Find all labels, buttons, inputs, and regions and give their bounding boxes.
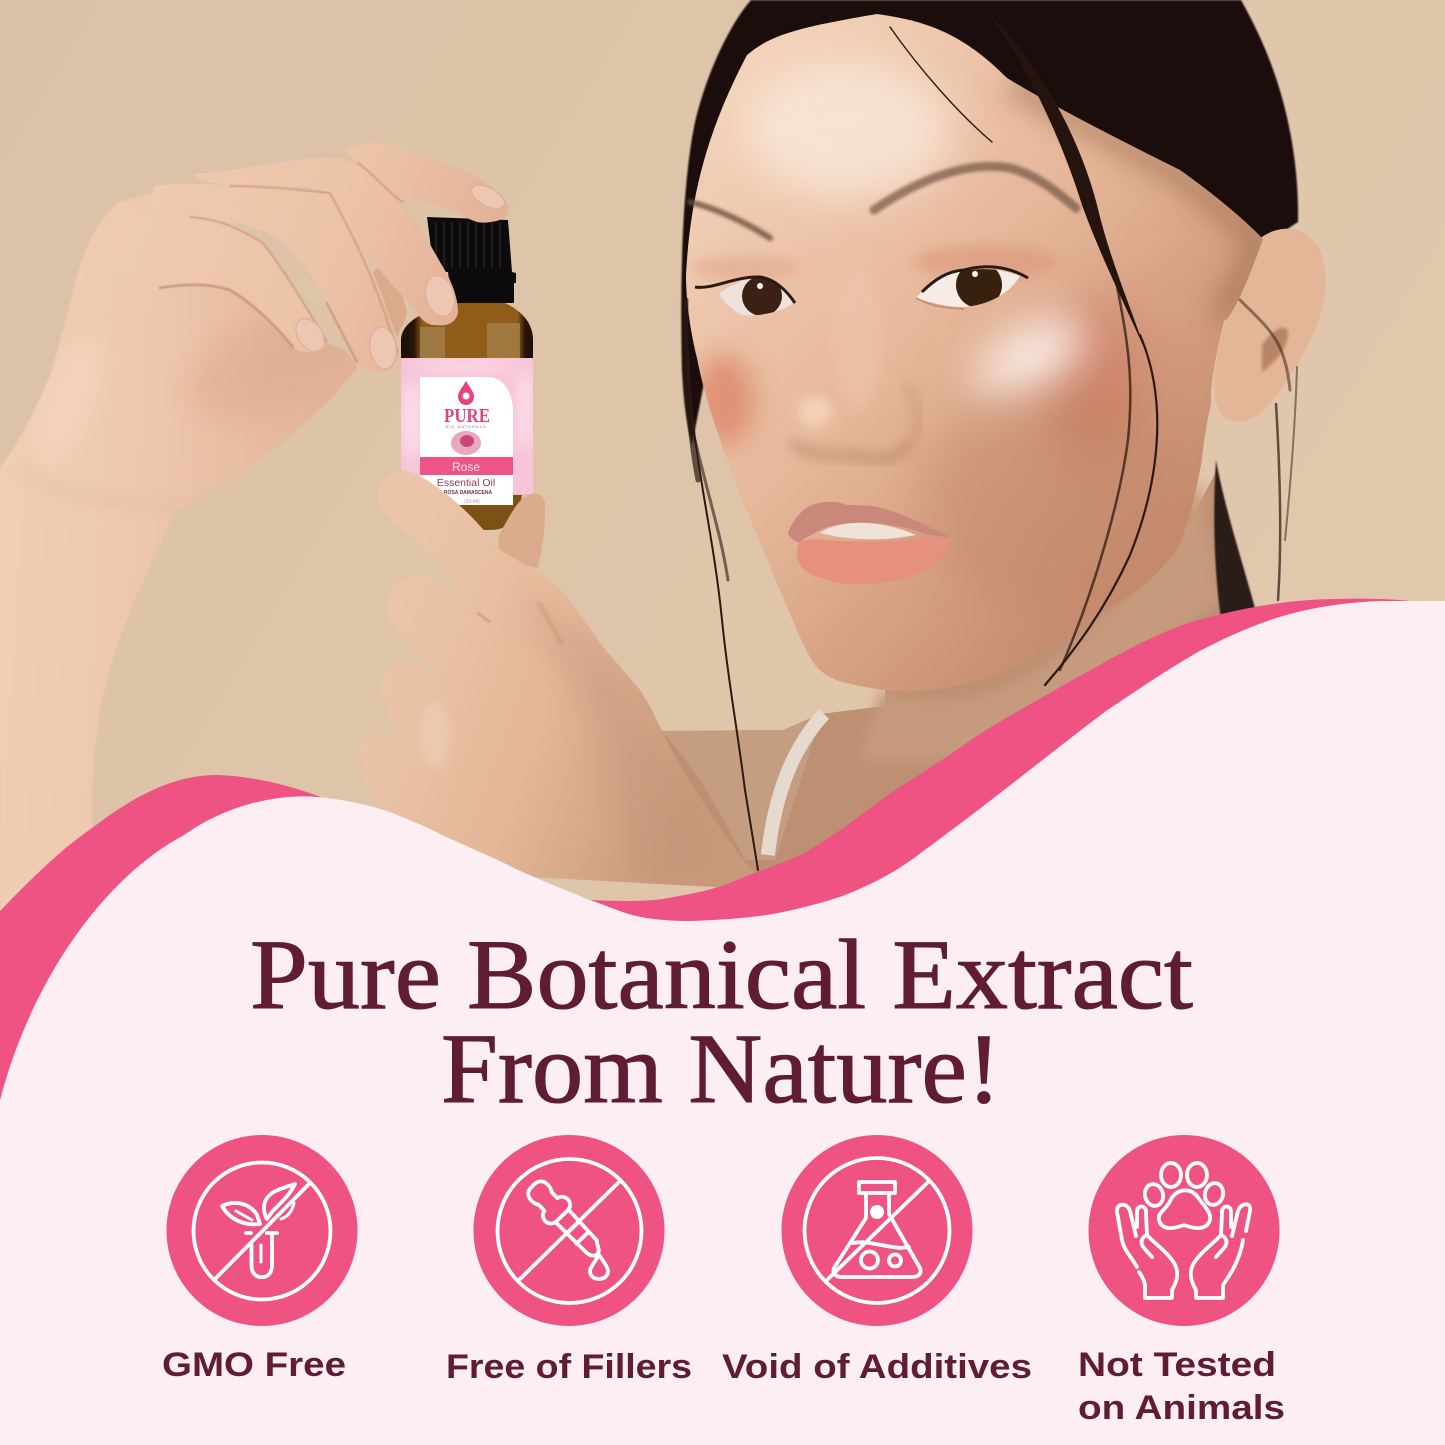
under nose shade — [792, 442, 908, 459]
hairline shade — [1010, 85, 1260, 320]
ear — [1214, 229, 1325, 421]
icon: GMO free — [166, 1135, 358, 1326]
left eyebrow — [690, 202, 770, 238]
finger separation shadows — [160, 163, 403, 362]
right cheek blush — [1045, 295, 1145, 465]
brand name: PURE — [444, 405, 490, 427]
left cheek blush — [694, 354, 754, 446]
under-chin warm tone — [926, 374, 1085, 570]
icon: void of additives — [782, 1135, 972, 1326]
right eye — [916, 262, 1028, 309]
bottle cap — [427, 217, 516, 303]
label: Free of Fillers: Free of Fillers — [446, 1348, 692, 1386]
fingernails — [290, 181, 508, 371]
light pink content panel — [0, 601, 1445, 1445]
upper hand fingers — [110, 143, 508, 372]
botanical name: ROSA DAMASCENA — [444, 490, 492, 496]
forehead highlight — [745, 60, 955, 200]
product type: Essential Oil — [437, 477, 495, 489]
label: Not Tested on Animals — [1078, 1346, 1285, 1427]
nose tip — [798, 396, 832, 428]
amber base — [430, 495, 522, 530]
face tones, clipped to the face — [690, 60, 1260, 610]
rose band — [420, 457, 513, 475]
right cheek shimmer — [962, 300, 1098, 416]
icon: not tested on animals — [1088, 1135, 1280, 1326]
label: GMO Free: GMO Free — [162, 1346, 346, 1384]
loose hair strands — [686, 10, 1297, 870]
little finger — [110, 202, 327, 353]
hand shading — [422, 601, 636, 766]
lips — [788, 502, 950, 584]
decorative pink wave — [0, 599, 1445, 1100]
right eyebrow — [874, 166, 1076, 210]
back hair ponytail — [1214, 460, 1256, 625]
brand tagline: BIO NATURALS — [445, 424, 487, 429]
photo background — [0, 0, 1445, 960]
knuckle behind middle finger — [373, 262, 407, 337]
brand drop logo — [458, 381, 474, 405]
heading — [250, 919, 1193, 1124]
face — [686, 14, 1263, 692]
lower hand shape — [360, 470, 770, 890]
left eye — [695, 276, 795, 316]
background gaps between fingers — [295, 235, 378, 307]
back fingertip — [498, 493, 545, 568]
bottle — [401, 217, 534, 530]
heading: From Nature! — [441, 1013, 1001, 1124]
hair mass — [681, 0, 1298, 445]
hand and arm: palm — [0, 190, 358, 915]
product name: Rose — [452, 460, 480, 474]
icon: free of fillers — [474, 1135, 664, 1326]
rose label — [401, 358, 534, 495]
eye makeup — [913, 245, 1057, 279]
rose image — [451, 431, 481, 455]
shoulder and neck — [661, 470, 1225, 900]
thumb over cap — [345, 143, 508, 223]
label white panel — [420, 377, 513, 505]
nose wing shade — [905, 385, 918, 448]
glass highlights — [420, 323, 520, 358]
label: Not Tested on Animals: on Animals — [1078, 1389, 1285, 1427]
nose bridge — [845, 327, 874, 401]
palm shading — [46, 328, 296, 446]
label: Not Tested on Animals: Not Tested — [1078, 1346, 1276, 1384]
volume: (10 ml) — [464, 499, 480, 505]
heading: Pure Botanical Extract — [250, 919, 1193, 1030]
photo: woman holding rose oil bottle — [0, 0, 1445, 960]
index finger — [194, 158, 458, 325]
label: Void of Additives: Void of Additives — [722, 1348, 1032, 1386]
ring finger — [150, 184, 398, 372]
amber glass — [401, 303, 533, 362]
lower hand — [360, 470, 770, 890]
